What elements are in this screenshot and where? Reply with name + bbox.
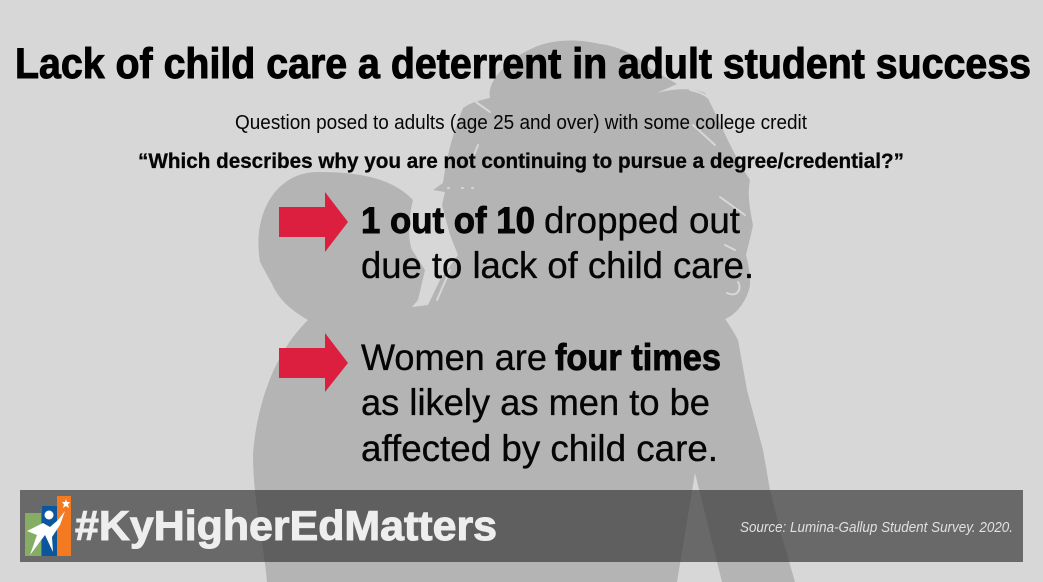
subtitle: Question posed to adults (age 25 and over) with some college credit (235, 112, 807, 134)
footer bar (20, 490, 1023, 562)
finding: four times: Women are (361, 337, 547, 378)
silhouette: mother holding child (253, 41, 795, 582)
finding: 1 out of 10 (361, 200, 754, 286)
arrow: first finding (279, 192, 348, 252)
survey question: “Which describes why you are not continuing to pursue a degree/credential?” (138, 149, 904, 173)
arrow: second finding (279, 333, 348, 392)
hashtag: #KyHigherEdMatters (75, 502, 497, 549)
finding: four times: affected by child care. (361, 428, 718, 469)
finding: four times: as likely as men to be (361, 382, 710, 423)
finding: 1 out of 10: 1 out of 10 (361, 200, 535, 241)
finding: four times (361, 337, 721, 469)
finding: 1 out of 10: dropped out (544, 200, 741, 241)
finding: 1 out of 10: due to lack of child care. (361, 245, 754, 286)
source note: Source: Lumina-Gallup Student Survey. 2020. (740, 520, 1013, 536)
finding: four times: four times (555, 337, 721, 378)
icon: logo with rising figure (25, 496, 71, 556)
